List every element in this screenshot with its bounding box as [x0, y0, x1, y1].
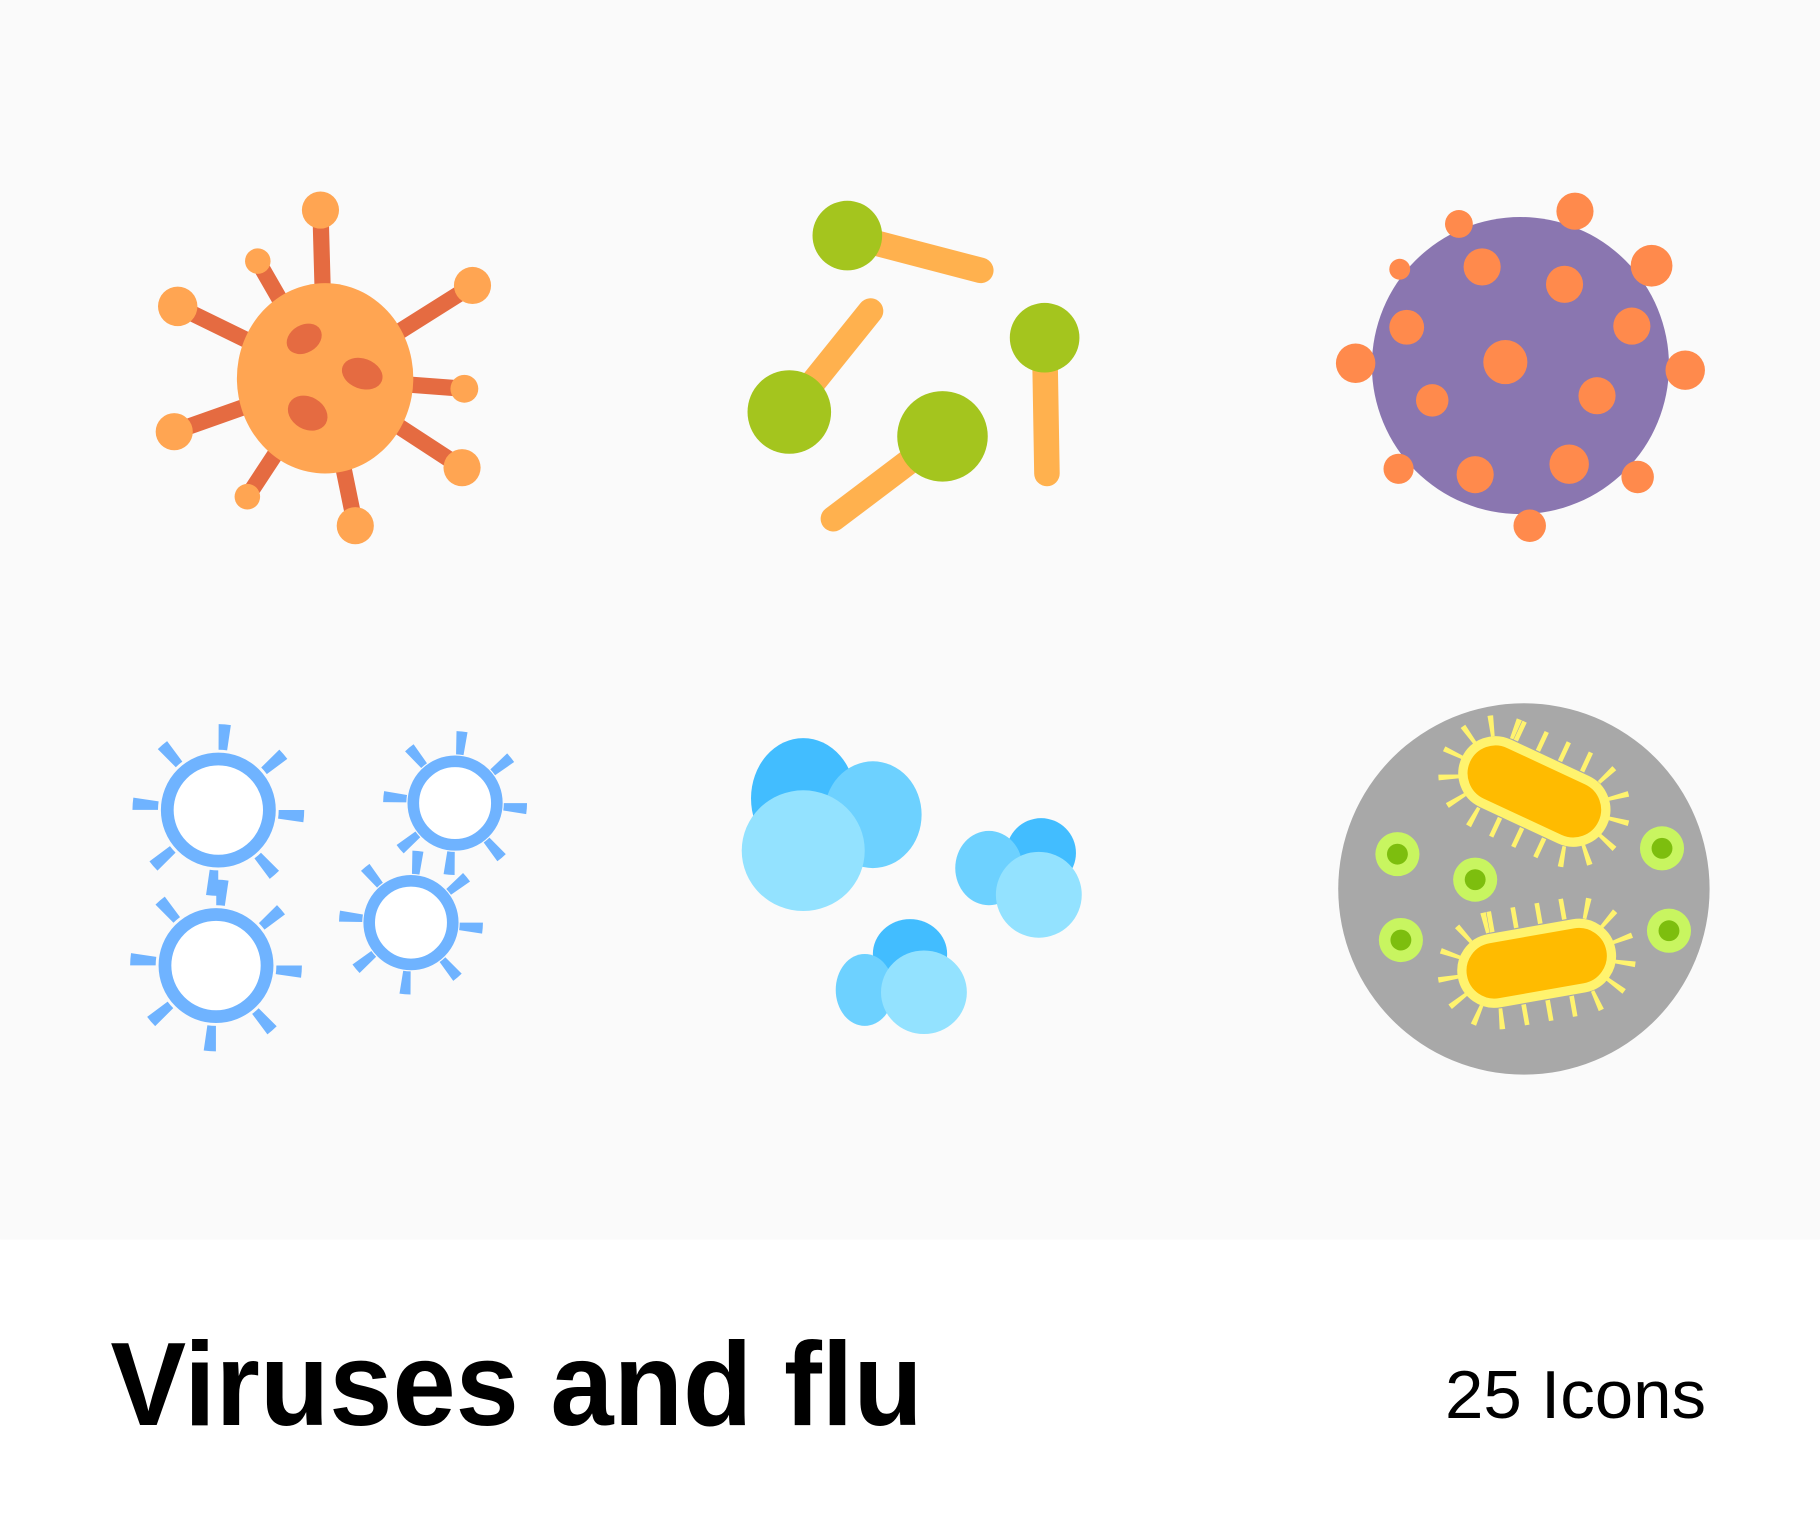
- icon: green bacteriophages: [748, 201, 1079, 519]
- icon: blue blobs: [742, 738, 1082, 1034]
- icon: blue viruses outline: [143, 737, 515, 1039]
- icon: purple virus: [1336, 193, 1705, 542]
- icon count: 25 Icons: [1445, 1358, 1706, 1433]
- title: Viruses and flu: [110, 1319, 923, 1451]
- icon: orange virus: [156, 191, 491, 544]
- icon: bacteria in petri dish: [1338, 703, 1710, 1075]
